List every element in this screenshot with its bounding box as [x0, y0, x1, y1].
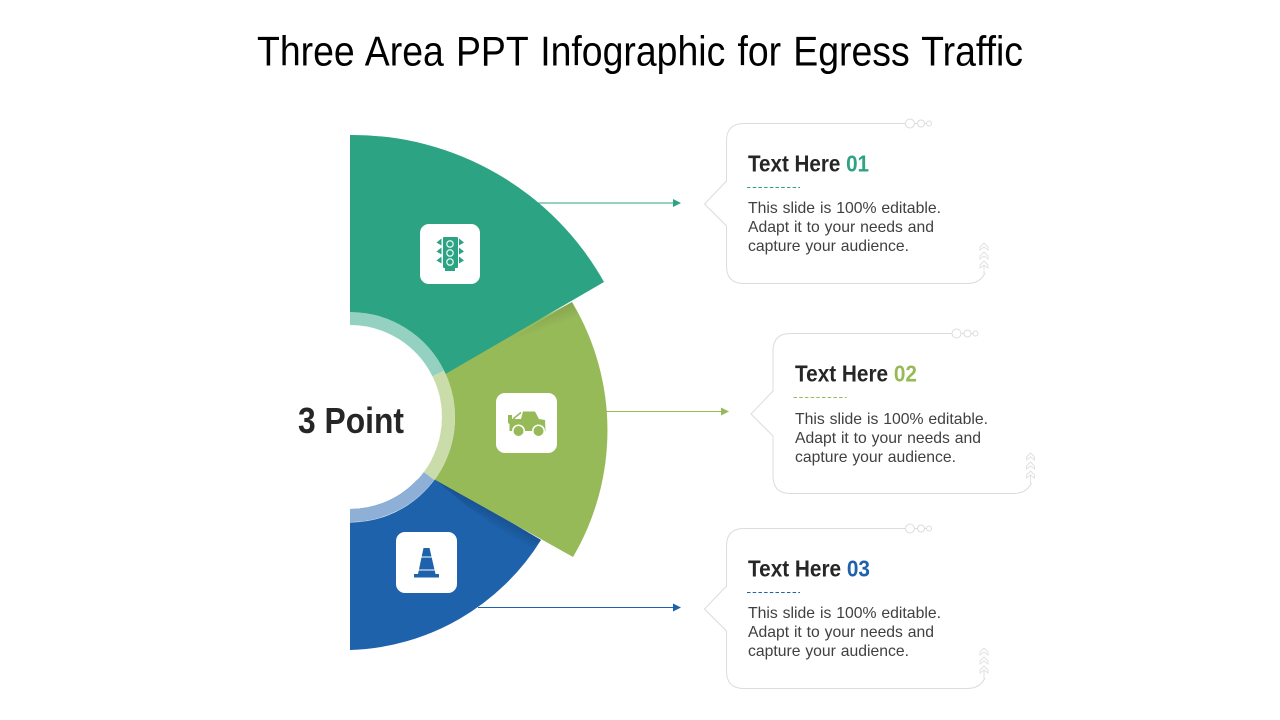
light green segment shadow	[480, 302, 582, 358]
card body: capture your audience.	[748, 238, 909, 255]
card ornament circles	[906, 119, 932, 128]
card ornament chevrons	[980, 243, 988, 274]
panel: text card 02	[751, 329, 1034, 494]
arrow: teal	[538, 199, 681, 207]
icon: car	[496, 393, 557, 453]
card heading: Text Here 01	[748, 150, 869, 176]
card heading: Text Here 02	[795, 360, 917, 386]
panel: segmented half-circle chart	[258, 135, 607, 650]
card body: Adapt it to your needs and	[748, 219, 934, 236]
card heading: Text Here 03	[748, 556, 870, 582]
card body: This slide is 100% editable.	[748, 200, 941, 217]
white backing behind ring	[350, 319, 448, 516]
ring: teal	[350, 318, 438, 374]
ring: blue	[350, 476, 429, 516]
icon: traffic light	[420, 224, 480, 284]
card outline	[704, 124, 985, 284]
panel: text card 01	[704, 119, 988, 284]
title: Three Area PPT Infographic for Egress Traffic	[257, 28, 1023, 74]
panel: text card 03	[704, 524, 988, 688]
ring: light green	[429, 374, 449, 476]
center label: 3 Point	[298, 400, 404, 441]
card outline	[704, 528, 985, 688]
card ornament chevrons	[980, 648, 988, 679]
card body: This slide is 100% editable.	[795, 411, 988, 428]
card body: Adapt it to your needs and	[748, 624, 934, 641]
arrow: light green	[606, 408, 729, 416]
card outline	[751, 334, 1032, 494]
segment: light green	[430, 302, 607, 557]
segment: blue	[350, 475, 541, 650]
arrow: blue	[478, 604, 681, 612]
blue segment shadow	[432, 477, 541, 549]
card body: This slide is 100% editable.	[748, 605, 941, 622]
card ornament chevrons	[1026, 453, 1034, 484]
segment: teal	[350, 135, 604, 400]
card body	[795, 411, 988, 466]
card body	[748, 200, 941, 255]
card body: capture your audience.	[795, 449, 956, 466]
center white circle	[258, 325, 442, 509]
card body	[748, 605, 941, 660]
card ornament circles	[952, 329, 978, 338]
card ornament circles	[906, 524, 932, 533]
card body: Adapt it to your needs and	[795, 430, 981, 447]
icon: traffic cone	[396, 532, 457, 593]
card body: capture your audience.	[748, 643, 909, 660]
